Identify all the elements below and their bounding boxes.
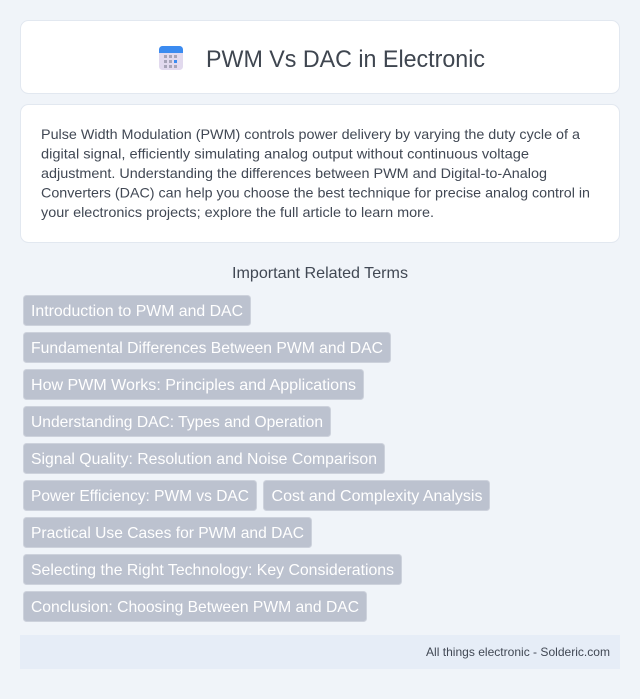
tag: understanding DAC <box>24 406 330 436</box>
intro paragraph: Pulse Width Modulation (PWM) controls power delivery by varying the duty cycle of a <box>41 126 580 142</box>
tag: fundamental differences: Fundamental Differences Between PWM and DAC <box>31 340 383 357</box>
tag: selecting the right technology: Selecting the Right Technology: Key Considerations <box>31 562 394 579</box>
tag: conclusion: Conclusion: Choosing Between PWM and DAC <box>31 599 359 616</box>
tag: cost and complexity: Cost and Complexity Analysis <box>272 488 482 505</box>
tag: how PWM works: How PWM Works: Principles and Applications <box>31 377 356 394</box>
footer <box>20 635 620 669</box>
icon: calendar grid <box>159 46 183 70</box>
tag: conclusion <box>24 592 366 622</box>
intro paragraph: Converters (DAC) can help you choose the best technique for precise analog control in <box>41 184 590 200</box>
tag: introduction: Introduction to PWM and DAC <box>31 303 243 320</box>
intro paragraph: adjustment. Understanding the differences between PWM and Digital-to-Analog <box>41 165 547 181</box>
panel: introduction text <box>20 104 620 242</box>
tag: fundamental differences <box>24 332 390 362</box>
tag: power efficiency: Power Efficiency: PWM vs DAC <box>31 488 249 505</box>
tag: selecting the right technology <box>24 554 402 584</box>
tag: introduction <box>24 296 250 326</box>
tag: signal quality <box>24 444 384 474</box>
title: PWM Vs DAC in Electronic <box>206 46 485 73</box>
intro paragraph: digital signal, efficiently simulating analog output without continuous voltage <box>41 146 529 162</box>
header panel <box>20 20 620 94</box>
tag: how PWM works <box>24 370 364 400</box>
footer credit: All things electronic - Solderic.com <box>426 645 610 659</box>
tag: cost and complexity <box>264 480 490 510</box>
tag: understanding DAC: Understanding DAC: Types and Operation <box>31 414 323 431</box>
intro paragraph: your electronics projects; explore the full article to learn more. <box>41 204 434 220</box>
tag: signal quality: Signal Quality: Resolution and Noise Comparison <box>31 451 377 468</box>
tag: power efficiency <box>24 480 256 510</box>
tag list <box>24 296 490 622</box>
tag: practical use cases: Practical Use Cases for PWM and DAC <box>31 525 304 542</box>
intro paragraph <box>41 126 590 220</box>
tag: practical use cases <box>24 518 312 548</box>
heading: important related terms: Important Related Terms <box>232 265 408 282</box>
